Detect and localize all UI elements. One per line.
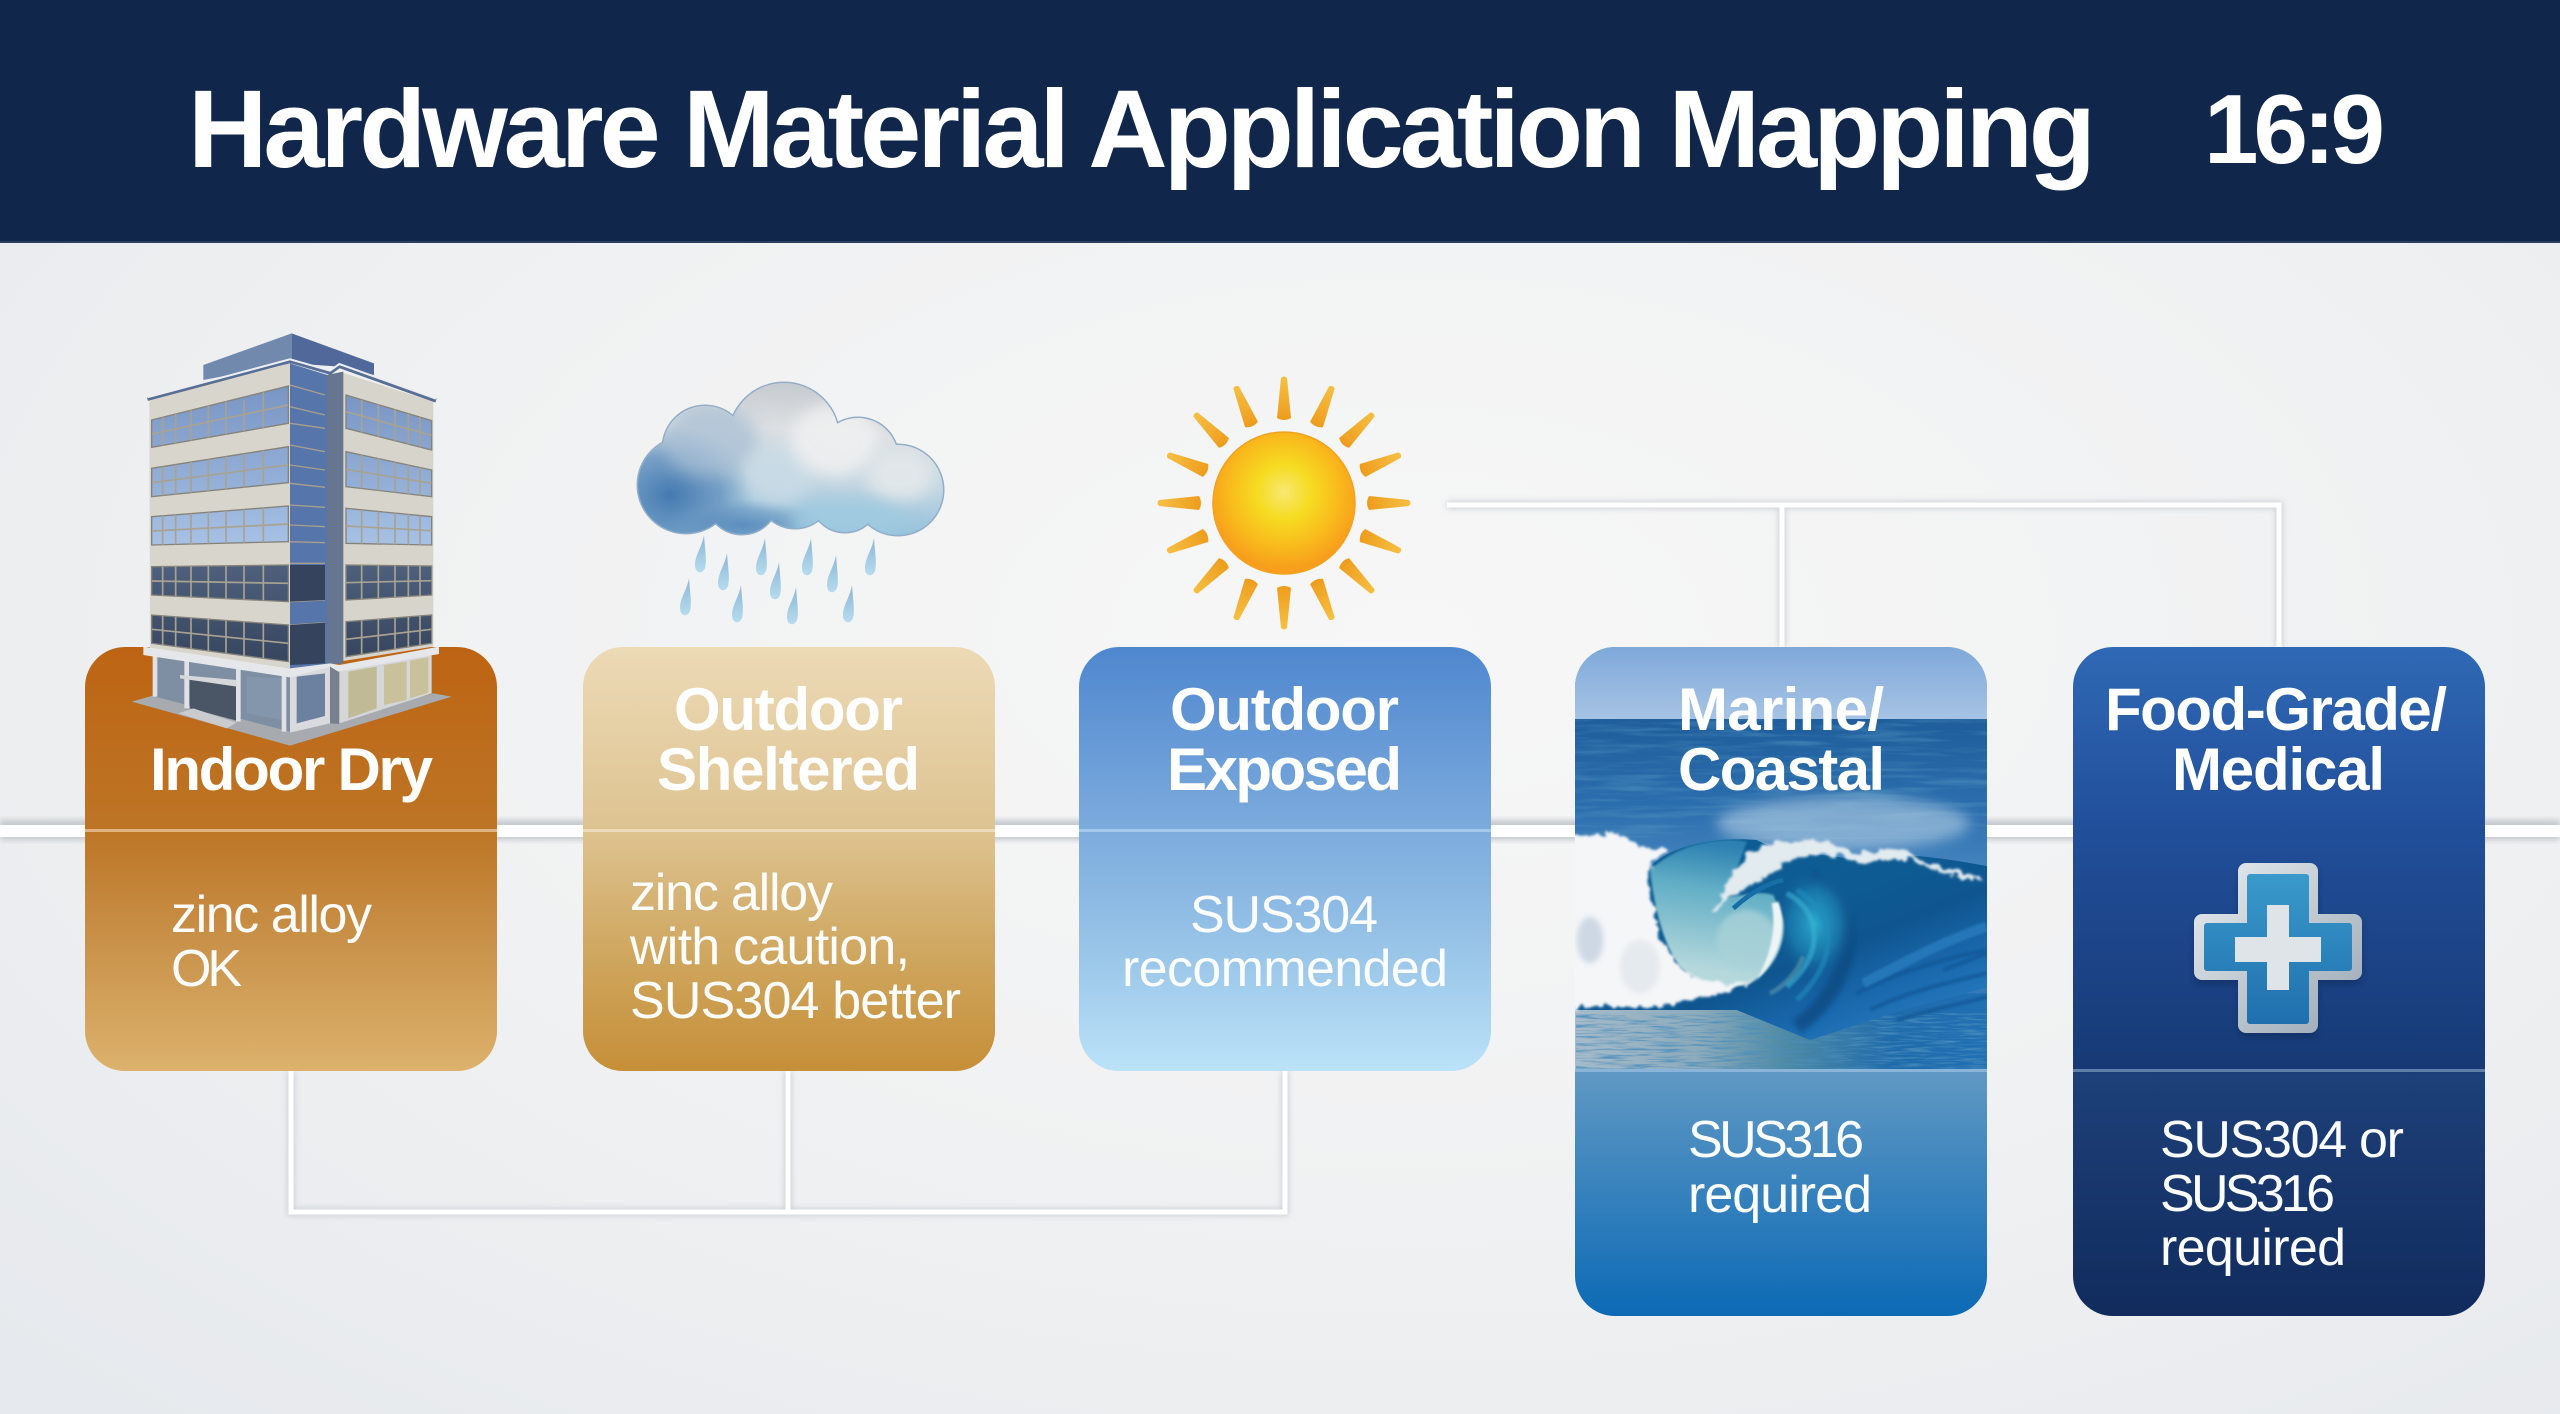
heading: outdoor exposed: [1167, 676, 1402, 803]
text: food grade medical material: SUS304 or: [2160, 1111, 2404, 1169]
heading: food grade medical: Medical: [2172, 736, 2385, 803]
text: indoor dry material: OK: [171, 940, 242, 998]
title: Hardware Material Application Mapping: [188, 68, 2096, 191]
text: outdoor sheltered material: with caution,: [629, 918, 910, 976]
heading: outdoor exposed: Exposed: [1167, 736, 1402, 803]
heading: indoor dry: Indoor Dry: [150, 736, 434, 803]
text: outdoor sheltered material: [629, 864, 961, 1030]
text: marine coastal material: required: [1688, 1166, 1872, 1224]
heading: marine coastal: Marine/: [1678, 676, 1884, 743]
text: marine coastal material: [1688, 1111, 1872, 1224]
heading: outdoor exposed: Outdoor: [1170, 676, 1399, 743]
icon: sun: [1158, 376, 1410, 630]
text: indoor dry material: [171, 886, 372, 998]
panel: outdoor exposed: [1079, 647, 1491, 1071]
heading: marine coastal: [1678, 676, 1885, 803]
heading: food grade medical: Food-Grade/: [2105, 676, 2447, 743]
icon: rain cloud: [636, 382, 944, 624]
text: outdoor exposed material: [1122, 886, 1448, 998]
heading: outdoor sheltered: Sheltered: [657, 736, 920, 803]
text: outdoor exposed material: recommended: [1122, 940, 1448, 998]
text: indoor dry material: zinc alloy: [171, 886, 372, 944]
icon: medical cross: [2194, 863, 2362, 1038]
text: marine coastal material: SUS316: [1688, 1111, 1864, 1169]
heading: outdoor sheltered: [657, 676, 920, 803]
image: ocean wave: [1575, 647, 1987, 1069]
panel: indoor dry: [85, 647, 497, 1071]
panel: outdoor sheltered: [583, 647, 995, 1071]
panel: marine coastal: [1543, 647, 2000, 1316]
central horizontal rail: [0, 820, 2560, 840]
connector: lower bracket joining cards 1 to 3: [291, 1071, 1285, 1212]
text: food grade medical material: required: [2160, 1219, 2346, 1277]
connector: upper bracket joining cards 4 and 5: [1447, 505, 2279, 647]
heading: marine coastal: Coastal: [1678, 736, 1885, 803]
text: outdoor sheltered material: zinc alloy: [630, 864, 833, 922]
text: outdoor exposed material: SUS304: [1190, 886, 1378, 944]
aspect ratio label: 16:9: [2204, 74, 2385, 184]
icon: office building: [132, 333, 452, 746]
text: outdoor sheltered material: SUS304 better: [630, 972, 961, 1030]
text: food grade medical material: [2160, 1111, 2404, 1277]
heading: outdoor sheltered: Outdoor: [674, 676, 903, 743]
panel: food grade medical: [2073, 647, 2485, 1316]
header banner: [0, 0, 2560, 243]
heading: food grade medical: [2105, 676, 2447, 803]
text: food grade medical material: SUS316: [2160, 1165, 2335, 1223]
rain drops: [680, 535, 876, 624]
